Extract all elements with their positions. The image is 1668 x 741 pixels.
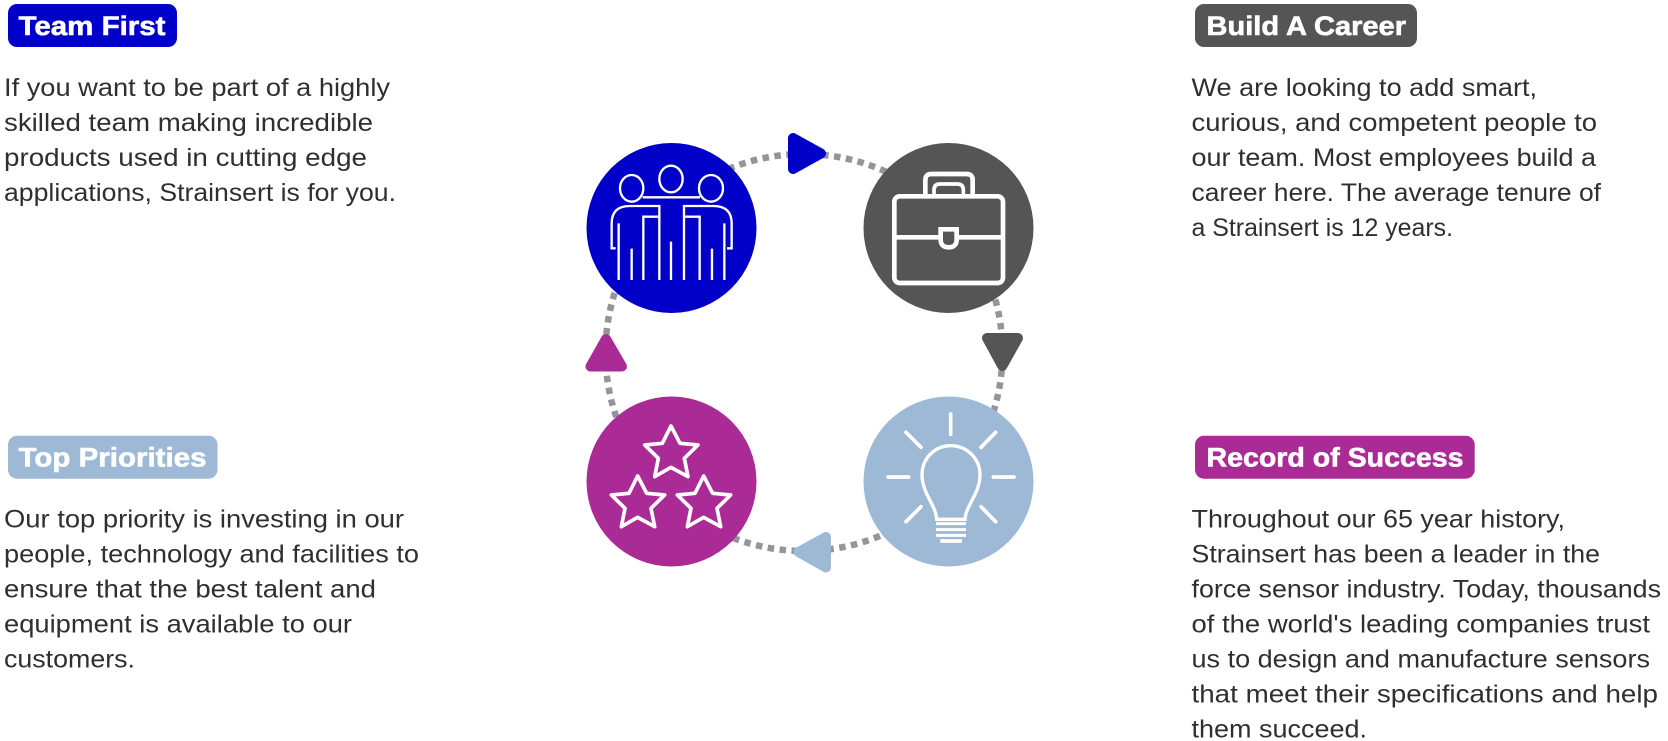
icon: light bulb: [864, 396, 1034, 566]
panel: top priorities: [4, 436, 419, 674]
text block: team first: products used in cutting edge: [4, 144, 367, 172]
text block: team first: applications, Strainsert is for you.: [4, 179, 396, 207]
arrow: left, purple: [590, 339, 622, 366]
text block: record of success: [1192, 506, 1661, 741]
text block: top priorities: ensure that the best talent and: [4, 576, 376, 604]
heading: team first: [8, 4, 177, 47]
text block: team first: If you want to be part of a highly: [4, 74, 391, 102]
text block: record of success: Strainsert has been a leader in the: [1192, 541, 1600, 569]
heading: top priorities: Top Priorities: [18, 443, 206, 473]
heading: record of success: Record of Success: [1206, 443, 1464, 473]
arrow: top, blue: [793, 138, 821, 169]
heading: team first: Team First: [18, 11, 166, 41]
icon: three stars: [586, 396, 756, 566]
text block: record of success: force sensor industry. Today, thousands: [1192, 576, 1661, 604]
dotted ring: [606, 154, 1002, 551]
panel: team first: [4, 4, 396, 207]
text block: build a career: our team. Most employees build a: [1192, 144, 1596, 172]
text block: top priorities: [4, 506, 419, 674]
text block: record of success: Throughout our 65 year history,: [1192, 506, 1565, 534]
panel: build a career: [1192, 4, 1601, 242]
text block: build a career: career here. The average tenure of: [1192, 179, 1601, 207]
text block: top priorities: customers.: [4, 646, 135, 674]
heading: build a career: [1195, 4, 1417, 47]
text block: record of success: us to design and manufacture sensors: [1192, 646, 1650, 674]
text block: build a career: We are looking to add smart,: [1192, 74, 1537, 102]
text block: team first: [4, 74, 396, 207]
text block: top priorities: people, technology and facilities to: [4, 541, 419, 569]
heading: top priorities: [8, 436, 218, 479]
heading: record of success: [1195, 436, 1475, 479]
icon: team of three people: [586, 143, 756, 313]
text block: build a career: curious, and competent people to: [1192, 109, 1597, 137]
text block: record of success: of the world's leading companies trust: [1192, 611, 1650, 639]
cycle diagram: [586, 138, 1034, 568]
text block: team first: skilled team making incredible: [4, 109, 373, 137]
text block: build a career: [1192, 74, 1601, 242]
text block: build a career: a Strainsert is 12 years.: [1192, 214, 1453, 242]
arrow: bottom, light blue: [798, 537, 826, 568]
heading: build a career: Build A Career: [1206, 11, 1407, 41]
icon: briefcase: [864, 143, 1034, 313]
panel: record of success: [1192, 436, 1661, 741]
text block: record of success: that meet their specifications and help: [1192, 681, 1658, 709]
arrow: right, grey: [987, 338, 1018, 366]
text block: top priorities: equipment is available to our: [4, 611, 352, 639]
text block: top priorities: Our top priority is investing in our: [4, 506, 404, 534]
